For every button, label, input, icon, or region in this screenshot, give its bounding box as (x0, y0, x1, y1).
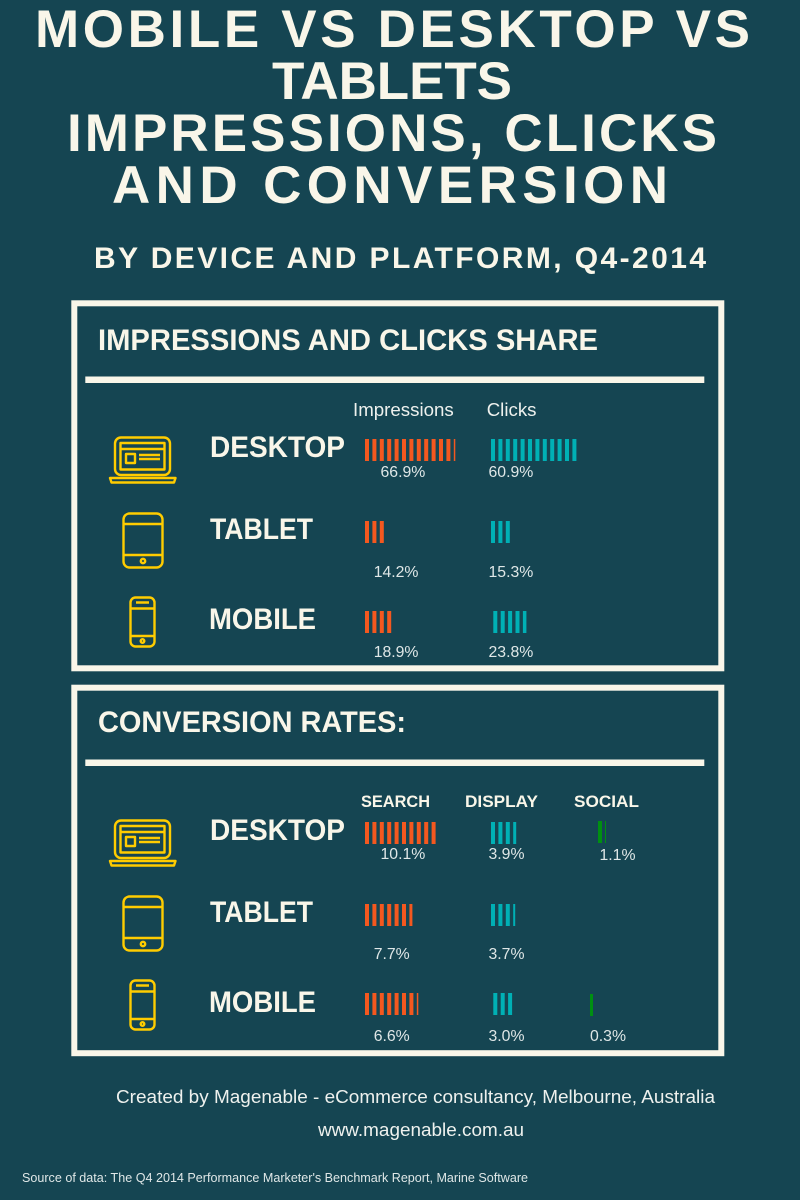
bar: desktop impressions (365, 439, 455, 461)
column header: impressions: Impressions (353, 399, 454, 420)
column header: clicks: Clicks (487, 399, 537, 420)
bar: desktop search (365, 822, 436, 844)
label: tablet: TABLET (210, 896, 313, 929)
source note: Source of data: The Q4 2014 Performance Marketer's Benchmark Report, Marine Software (22, 1170, 528, 1185)
label: desktop: DESKTOP (210, 814, 345, 847)
bar: tablet impressions (365, 521, 384, 543)
values: impressions and clicks (374, 464, 533, 661)
values: impressions and clicks: 60.9% (488, 464, 533, 481)
values: impressions and clicks: 15.3% (488, 564, 533, 581)
bar: mobile clicks (493, 611, 526, 633)
bar: desktop social (598, 821, 606, 843)
values: impressions and clicks: 14.2% (374, 564, 418, 581)
values: conversion rates: 3.7% (488, 946, 525, 963)
title (35, 0, 750, 215)
panel frame (74, 303, 721, 668)
column header: social: SOCIAL (574, 792, 639, 811)
values: conversion rates: 3.9% (488, 846, 525, 863)
values: impressions and clicks: 66.9% (380, 464, 425, 481)
bar: tablet display (491, 904, 515, 926)
title: MOBILE VS DESKTOP VS (35, 0, 750, 59)
footer website: www.magenable.com.au (317, 1119, 524, 1140)
icon: tablet (124, 896, 162, 950)
values: impressions and clicks: 18.9% (374, 644, 418, 661)
bar: desktop clicks (491, 439, 576, 461)
subtitle: BY DEVICE AND PLATFORM, Q4-2014 (94, 242, 706, 275)
label: mobile: MOBILE (209, 986, 316, 1019)
bar: mobile display (493, 993, 512, 1015)
icon: mobile (130, 980, 154, 1030)
footer credit: Created by Magenable - eCommerce consultancy, Melbourne, Australia (116, 1086, 716, 1107)
icon: tablet (124, 514, 162, 568)
panel: impressions and clicks share (74, 303, 721, 668)
values: conversion rates: 3.0% (488, 1028, 525, 1045)
bar: desktop display (491, 822, 516, 844)
bar: mobile impressions (365, 611, 391, 633)
values: conversion rates: 10.1% (380, 846, 425, 863)
values: conversion rates: 7.7% (374, 946, 410, 963)
label: tablet: TABLET (210, 513, 313, 546)
bar: mobile social (590, 994, 593, 1016)
icon: laptop (110, 438, 176, 482)
panel heading: CONVERSION RATES: (98, 706, 406, 739)
title: AND CONVERSION (112, 156, 668, 215)
icon: laptop (110, 820, 176, 866)
column header: display: DISPLAY (465, 792, 539, 811)
panel: conversion rates (74, 688, 721, 1053)
bar: mobile search (365, 993, 418, 1015)
values: conversion rates (374, 846, 636, 1045)
values: impressions and clicks: 23.8% (488, 644, 533, 661)
values: conversion rates: 0.3% (590, 1028, 626, 1045)
values: conversion rates: 6.6% (374, 1028, 410, 1045)
label: desktop: DESKTOP (210, 431, 345, 464)
label: mobile: MOBILE (209, 603, 316, 636)
title: IMPRESSIONS, CLICKS (67, 104, 717, 163)
title: TABLETS (272, 52, 512, 111)
icon: mobile (130, 598, 154, 646)
column header: search: SEARCH (361, 792, 430, 811)
panel frame (74, 688, 721, 1053)
bar: tablet search (365, 904, 412, 926)
values: conversion rates: 1.1% (600, 847, 636, 864)
panel heading: IMPRESSIONS AND CLICKS SHARE (98, 324, 598, 357)
bar: tablet clicks (491, 521, 510, 543)
